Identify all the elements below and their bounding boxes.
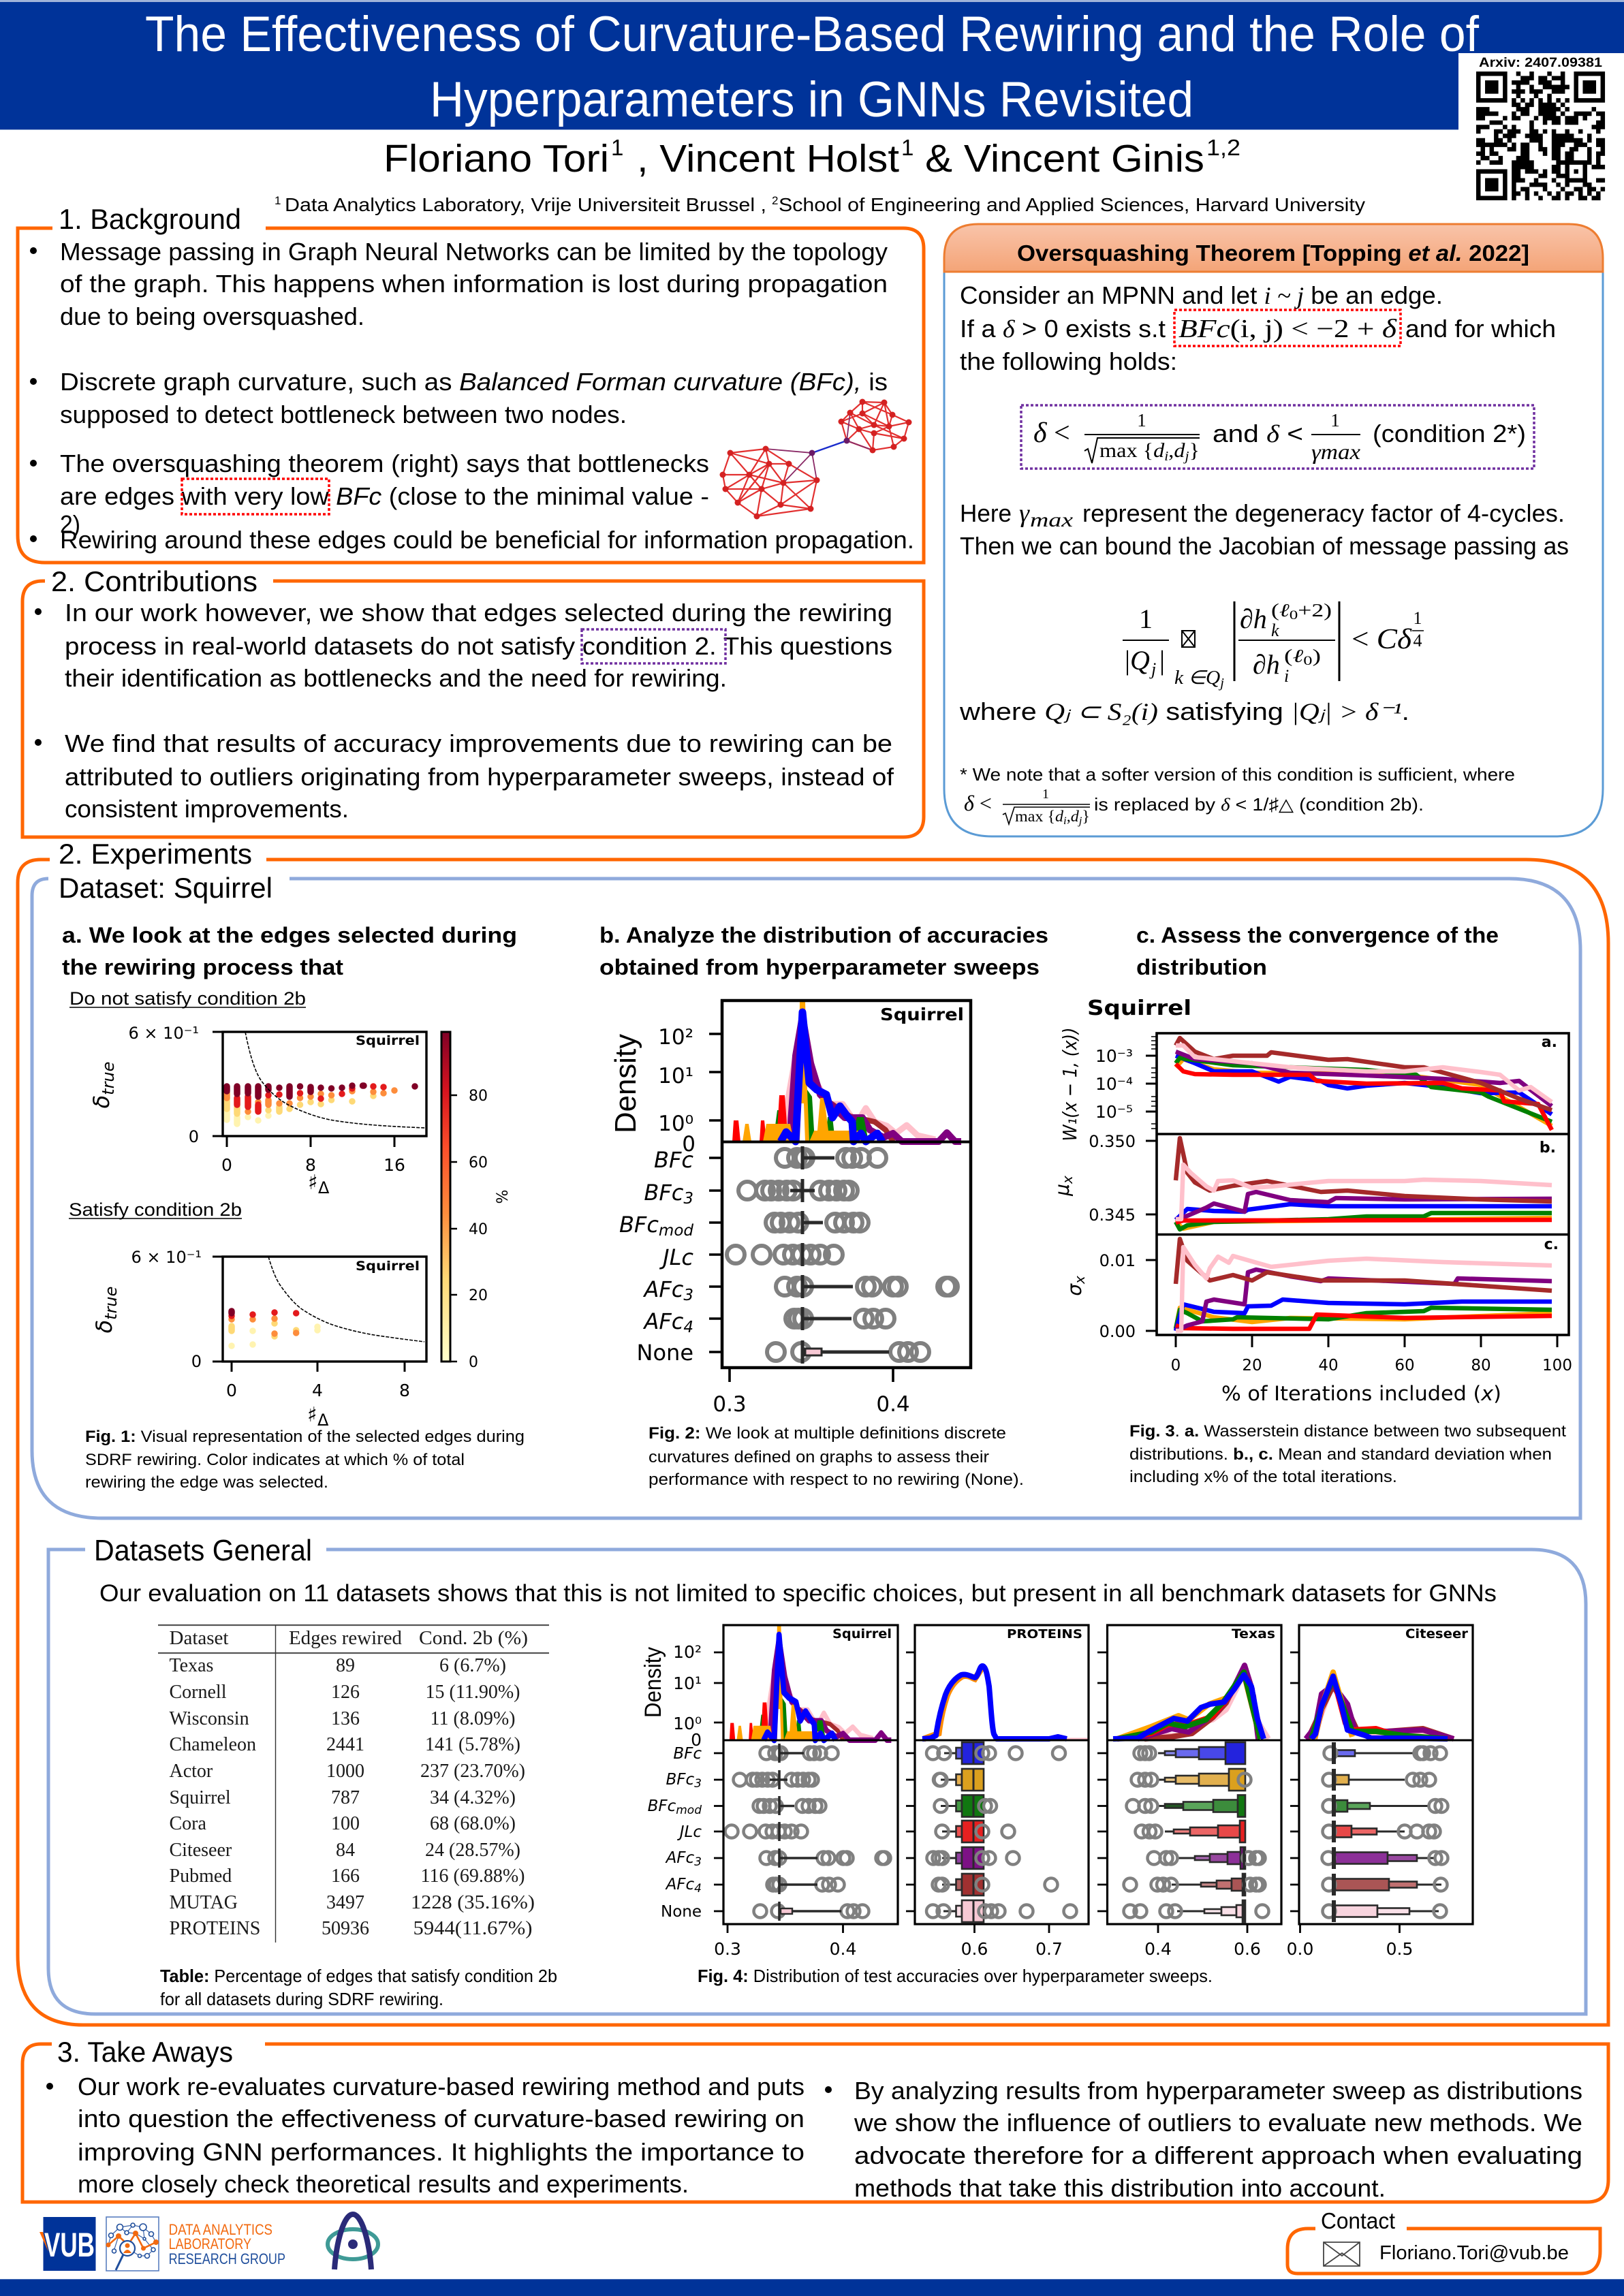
logo: Data Analytics Laboratory: LABORATORY (169, 2235, 251, 2252)
panel: Oversquashing Theorem: } (1189, 439, 1200, 462)
heading a: the rewiring process that (62, 955, 343, 979)
caption: Fig 2: curvatures defined on graphs to assess their (649, 1448, 989, 1466)
curves: panel a (1176, 1038, 1552, 1130)
panel: contact (1287, 2208, 1600, 2274)
title banner: Hyperparameters in GNNs Revisited (430, 72, 1193, 127)
chart: Fig 4 Squirrel panel: 0.4 (830, 1939, 856, 1959)
table: condition 2b percentages: 1000 (326, 1761, 364, 1782)
chart: Fig 4 Squirrel panel: mod (676, 1804, 702, 1817)
equation: Jacobian bound: |Q (1125, 645, 1150, 676)
chart: Fig 4 Squirrel panel: 3 (694, 1855, 702, 1869)
logo: VUB (40, 2217, 95, 2271)
table: condition 2b percentages: 24 (28.57%) (425, 1840, 520, 1861)
panel: Oversquashing Theorem: } (1082, 808, 1090, 825)
table: condition 2b percentages: Wisconsin (169, 1708, 249, 1729)
chart: Fig 4 Squirrel panel (640, 1625, 898, 1959)
colorbar: 20 (469, 1287, 488, 1304)
chart: Fig 4 Squirrel panel: JLc (677, 1823, 702, 1841)
panel: Oversquashing Theorem: max (1030, 509, 1074, 531)
table: condition 2b percentages: 34 (4.32%) (430, 1787, 516, 1808)
caption: Fig 1 (85, 1428, 525, 1492)
table: condition 2b percentages: 84 (336, 1840, 355, 1861)
panel: 1. Background: supposed to detect bottleneck between two nodes. (60, 400, 627, 428)
panel: Oversquashing Theorem: and δ < (1213, 420, 1303, 447)
logo: Data Analytics Laboratory: DATA ANALYTICS (169, 2221, 272, 2238)
subheading: satisfy: Satisfy condition 2b (69, 1199, 242, 1220)
scatter chart: satisfy: Δ (317, 1411, 329, 1430)
panel: 3. Take Aways: By analyzing results from hyperparameter sweep as distributions (854, 2077, 1582, 2105)
title banner (0, 0, 1624, 130)
panel: Oversquashing Theorem: Then we can bound the Jacobian of message passing as (960, 532, 1569, 560)
chart: Fig 4 Squirrel panel: Density (640, 1647, 666, 1718)
panel: Oversquashing Theorem: max {d (1015, 808, 1063, 825)
panel: Oversquashing Theorem: represent the degeneracy factor of 4-cycles. (1082, 499, 1565, 527)
authors: 1 (611, 135, 623, 160)
title banner: The Effectiveness of Curvature-Based Rewiring and the Role of (145, 7, 1480, 62)
scatter chart: satisfy: 8 (399, 1381, 410, 1400)
panel: 2. Contributions: attributed to outliers originating from hyperparameter sweeps, instead of (65, 763, 894, 791)
scatter chart: satisfy: 0 (191, 1352, 202, 1371)
chart: Fig 4 Citeseer panel: 0.5 (1386, 1939, 1413, 1959)
panel: Oversquashing Theorem: j (1183, 449, 1189, 464)
equation: Jacobian bound: ) (1312, 646, 1321, 666)
panel: contact: Floriano.Tori@vub.be (1379, 2242, 1569, 2264)
caption: Fig 3: distributions. b., c. Mean and standard deviation when (1129, 1445, 1552, 1464)
chart: convergence curves: b. (1540, 1139, 1556, 1157)
scatter chart: do not satisfy: 6 × 10⁻¹ (129, 1024, 199, 1043)
chart: accuracy distribution Squirrel: 0.4 (876, 1392, 910, 1417)
chart: convergence curves: Squirrel (1087, 996, 1191, 1020)
table: condition 2b percentages: MUTAG (169, 1892, 238, 1913)
scatter chart: do not satisfy: 16 (384, 1155, 405, 1175)
panel: Oversquashing Theorem: max {d (1099, 439, 1164, 462)
heading b (599, 923, 1048, 979)
authors: 1,2 (1206, 135, 1240, 160)
chart: accuracy distribution Squirrel: AFc (644, 1276, 683, 1302)
panel: Oversquashing Theorem: , (1067, 808, 1071, 825)
chart: Fig 4 Texas panel: 0.4 (1144, 1939, 1172, 1959)
scatter chart: satisfy: Squirrel (356, 1259, 420, 1274)
table: condition 2b percentages: 50936 (322, 1918, 369, 1939)
equation: Jacobian bound: j (1149, 659, 1156, 679)
scatter chart: do not satisfy: δ (89, 1095, 114, 1108)
chart: Fig 4 Citeseer panel: Citeseer (1405, 1626, 1469, 1641)
chart: convergence curves: 10⁻⁵ (1095, 1102, 1133, 1122)
scatter chart: do not satisfy: Squirrel (356, 1033, 420, 1048)
table: condition 2b percentages: 1228 (35.16%) (411, 1892, 535, 1913)
chart: Fig 4 Citeseer panel (1287, 1625, 1473, 1959)
equation: Jacobian bound: (ℓ (1284, 646, 1300, 666)
table: condition 2b percentages: Chameleon (169, 1734, 256, 1755)
equation: Jacobian bound (1123, 600, 1424, 691)
caption: Fig 2: Fig. 2: We look at multiple definitions discrete (649, 1424, 1006, 1443)
colorbar: 40 (469, 1221, 488, 1238)
caption: Fig 1: SDRF rewiring. Color indicates at which % of total (85, 1451, 465, 1469)
colorbar: 0 (469, 1354, 478, 1371)
equation: Jacobian bound: k (1271, 620, 1279, 640)
chart: Fig 4 Squirrel panel: 0 (691, 1730, 702, 1750)
chart: convergence curves: μ (1051, 1184, 1074, 1196)
authors: & Vincent Ginis (925, 137, 1204, 180)
panel: 3. Take Aways: advocate therefore for a different approach when evaluating (854, 2141, 1582, 2169)
table: condition 2b percentages: 100 (331, 1813, 360, 1834)
table: condition 2b percentages: 237 (23.70%) (420, 1761, 525, 1782)
panel: 2. Contributions: their identification as bottlenecks and the need for rewiring. (65, 664, 727, 692)
table: condition 2b percentages: 116 (69.88%) (421, 1866, 525, 1887)
chart: Fig 4 PROTEINS panel: 0.7 (1035, 1939, 1063, 1959)
table: condition 2b percentages: 787 (331, 1787, 360, 1808)
equation: Jacobian bound: (ℓ (1271, 600, 1287, 620)
chart: convergence curves: σ (1063, 1284, 1086, 1296)
chart: Fig 4 PROTEINS panel (906, 1625, 1089, 1959)
boxen rows (1335, 1750, 1441, 1917)
panel: Dataset Squirrel box: Dataset: Squirrel (59, 872, 272, 904)
table: condition 2b percentages: Citeseer (169, 1840, 232, 1861)
panel: 2. Experiments outer box: 2. Experiments (59, 838, 252, 870)
panel: Oversquashing Theorem: 1 (1330, 410, 1340, 430)
heading b: obtained from hyperparameter sweeps (599, 955, 1040, 979)
chart: Fig 4 Squirrel panel: 10¹ (673, 1673, 702, 1693)
scatter chart: satisfy: δ (91, 1320, 117, 1333)
heading a (62, 923, 517, 979)
chart: convergence curves: c. (1544, 1236, 1559, 1253)
panel: 1. Background: Discrete graph curvature, such as Balanced Forman curvature (BFc), is (60, 368, 888, 396)
panel: 1. Background: Message passing in Graph Neural Networks can be limited by the topology (60, 238, 888, 266)
chart: accuracy distribution Squirrel: AFc (644, 1308, 683, 1334)
table: condition 2b percentages: Dataset (169, 1628, 229, 1649)
caption: Fig 1: Fig. 1: Visual representation of the selected edges during (85, 1428, 525, 1446)
panel: Datasets General box (48, 1534, 1586, 2014)
chart: convergence curves (1051, 996, 1572, 1405)
scatter chart: do not satisfy: Δ (318, 1178, 330, 1197)
table: condition 2b percentages: 166 (331, 1866, 360, 1887)
scatter chart: do not satisfy: ♯ (308, 1171, 318, 1195)
subheading: do not satisfy: Do not satisfy condition 2b (69, 988, 306, 1009)
equation: Jacobian bound: 0 (1290, 608, 1298, 623)
affiliations: School of Engineering and Applied Sciences, Harvard University (779, 194, 1365, 215)
equation: Jacobian bound: 1 (1139, 603, 1153, 634)
chart: accuracy distribution Squirrel: 3 (683, 1190, 693, 1208)
chart: convergence curves: 20 (1242, 1357, 1262, 1374)
table: condition 2b percentages: Cora (169, 1813, 207, 1834)
chart: Fig 4 Citeseer panel: 0.0 (1287, 1939, 1313, 1959)
chart: Fig 4 PROTEINS panel: PROTEINS (1007, 1627, 1082, 1641)
icon: envelope (1324, 2242, 1360, 2266)
table: condition 2b percentages: Actor (169, 1761, 213, 1782)
curves: panel b (1176, 1138, 1552, 1229)
chart: Fig 4 Squirrel panel: BFc (648, 1797, 676, 1815)
chart: convergence curves: 0.01 (1099, 1251, 1136, 1270)
panel: Oversquashing Theorem: γmax (1311, 439, 1360, 464)
chart: Fig 4 Squirrel panel: 0.3 (714, 1939, 741, 1959)
equation: Jacobian bound: 1 (1413, 608, 1422, 628)
chart: accuracy distribution Squirrel: BFc (644, 1180, 683, 1206)
chart: Fig 4 PROTEINS panel: 0.6 (961, 1939, 988, 1959)
chart: convergence curves: 100 (1542, 1357, 1572, 1374)
logo: Data Analytics Laboratory: RESEARCH GROUP (169, 2250, 285, 2267)
panel: 3. Take Aways: improving GNN performances. It highlights the importance to (78, 2138, 805, 2166)
heading a: a. We look at the edges selected during (62, 923, 517, 947)
QR code with arXiv id (1458, 53, 1624, 204)
curves: panel c (1176, 1239, 1552, 1331)
affiliations: 2 (772, 194, 778, 207)
table: condition 2b percentages: 15 (11.90%) (426, 1682, 520, 1703)
boxen rows (1158, 1742, 1245, 1922)
chart: accuracy distribution Squirrel: None (637, 1340, 693, 1366)
colorbar: 60 (469, 1154, 488, 1171)
panel: Oversquashing Theorem: where Qⱼ ⊂ S₂(i) satisfying |Qⱼ| > δ⁻¹ . (959, 697, 1409, 725)
chart: Fig 4 Squirrel panel: AFc (666, 1849, 694, 1867)
panel: Oversquashing Theorem: 1 (1042, 787, 1049, 802)
table: condition 2b percentages: Cond. 2b (%) (419, 1628, 528, 1649)
chart: Fig 4 Squirrel panel: None (661, 1903, 702, 1921)
chart: convergence curves: x (1072, 1276, 1088, 1285)
chart: accuracy distribution Squirrel (609, 1001, 971, 1417)
scatter chart: satisfy: 6 × 10⁻¹ (131, 1248, 202, 1267)
scatter chart: satisfy: 0 (226, 1381, 237, 1400)
icon: graph with bottleneck (719, 399, 911, 519)
chart: convergence curves: 0.345 (1089, 1206, 1136, 1225)
table: condition 2b percentages: PROTEINS (169, 1918, 260, 1939)
panel: 2. Contributions: We find that results of accuracy improvements due to rewiring can be (65, 729, 892, 757)
logo: A with ring (328, 2214, 378, 2269)
chart: convergence curves: x (1059, 1176, 1076, 1184)
table: condition 2b percentages: Edges rewired (289, 1628, 402, 1649)
caption: Fig 2 (649, 1424, 1024, 1489)
chart: Fig 4 Squirrel panel: BFc (673, 1745, 702, 1763)
panel: Oversquashing Theorem: d (1174, 439, 1186, 462)
chart: Fig 4 Squirrel panel: 4 (694, 1882, 702, 1896)
table: condition 2b percentages: 2441 (326, 1734, 364, 1755)
equation: Jacobian bound: j (1218, 676, 1224, 691)
panel: 1. Background: 1. Background (59, 203, 241, 235)
chart: Fig 4 Squirrel panel: 10² (673, 1642, 702, 1662)
logo: VUB: VUB (44, 2226, 95, 2264)
heading b: b. Analyze the distribution of accuracies (599, 923, 1048, 947)
table: condition 2b percentages: 3497 (326, 1892, 364, 1913)
chart: Fig 4 Texas panel (1097, 1625, 1281, 1959)
table: condition 2b percentages: 6 (6.7%) (439, 1655, 506, 1676)
panel: 2. Contributions: process in real-world datasets do not satisfy condition 2. This questions (65, 632, 892, 660)
chart: accuracy distribution Squirrel: 10² (658, 1025, 693, 1050)
chart: Fig 4 Texas panel: Texas (1232, 1626, 1275, 1641)
scatter chart: do not satisfy: 8 (305, 1155, 316, 1175)
chart: convergence curves: 0.00 (1099, 1322, 1136, 1341)
panel: 3. Take Aways: 3. Take Aways (57, 2036, 233, 2068)
panel: Oversquashing Theorem: 1 (1137, 410, 1146, 430)
panel: Oversquashing Theorem: (condition 2*) (1373, 420, 1526, 447)
panel: Oversquashing Theorem: δ < (964, 791, 992, 815)
chart: accuracy distribution Squirrel: 10⁰ (658, 1112, 693, 1136)
panel: 2. Contributions: In our work however, we show that edges selected during the rewiring (65, 599, 892, 627)
table: condition 2b percentages (158, 1625, 549, 1943)
equation: Jacobian bound: < Cδ (1352, 624, 1413, 655)
authors: Floriano Tori (384, 137, 609, 180)
panel: 3. Take Aways: we show the influence of outliers to evaluate new methods. We (854, 2109, 1582, 2137)
logo: Data Analytics Laboratory (106, 2217, 285, 2271)
panel: 3. Take Aways: methods that take this distribution into account. (854, 2174, 1386, 2202)
panel: Oversquashing Theorem: γ (1019, 499, 1030, 528)
heading c: c. Assess the convergence of the (1136, 923, 1499, 947)
QR code with arXiv id: Arxiv: 2407.09381 (1479, 56, 1602, 70)
panel: Datasets General box: Our evaluation on 11 datasets shows that this is not limited to specific choices, but present in all benchmark datasets for GNNs (99, 1580, 1497, 1607)
panel: 3. Take Aways: Our work re-evaluates curvature-based rewiring method and puts (78, 2073, 805, 2101)
chart: accuracy distribution Squirrel: 0 (682, 1132, 696, 1157)
caption: Fig 1: rewiring the edge was selected. (85, 1473, 328, 1492)
table: condition 2b percentages: 126 (331, 1682, 360, 1703)
panel: Oversquashing Theorem: Here (960, 499, 1012, 527)
equation: Jacobian bound: | (1159, 645, 1165, 676)
table: condition 2b percentages: 136 (331, 1708, 360, 1729)
scatter chart: satisfy: true (102, 1287, 121, 1320)
chart: convergence curves: 40 (1318, 1357, 1339, 1374)
chart: accuracy distribution Squirrel: 10¹ (658, 1064, 693, 1088)
panel: 1. Background: The oversquashing theorem (right) says that bottlenecks (60, 450, 709, 477)
panel: Oversquashing Theorem: and for which (1405, 315, 1556, 343)
chart: accuracy distribution Squirrel: 3 (683, 1287, 693, 1304)
panel: Oversquashing Theorem: BFc (i, j) < −2 + δ (1178, 315, 1398, 343)
panel: 3. Take Aways: more closely check theoretical results and experiments. (78, 2170, 689, 2198)
chart: Fig 4 Texas panel: 0.6 (1234, 1939, 1261, 1959)
colorbar: % (495, 1190, 512, 1204)
chart: accuracy distribution Squirrel: Density (609, 1034, 642, 1133)
equation: Jacobian bound: ∂h (1253, 649, 1280, 680)
panel: 3. Take Aways: into question the effectiveness of curvature-based rewiring on (78, 2105, 805, 2133)
equation: Jacobian bound: i (1284, 666, 1289, 686)
boxen rows (941, 1742, 984, 1922)
equation: Jacobian bound: 0 (1303, 654, 1312, 668)
panel: Oversquashing Theorem: is replaced by δ < 1/♯△ (condition 2b). (1094, 794, 1424, 815)
table: condition 2b percentages: 68 (68.0%) (430, 1813, 516, 1834)
scatter chart: do not satisfy (89, 1024, 426, 1197)
equation: Jacobian bound: 4 (1413, 631, 1422, 650)
panel: Oversquashing Theorem: , (1168, 439, 1174, 462)
chart: accuracy distribution Squirrel: mod (659, 1222, 693, 1240)
chart: convergence curves: 60 (1394, 1357, 1415, 1374)
chart: convergence curves: 10⁻³ (1095, 1046, 1133, 1066)
chart: accuracy distribution Squirrel: JLc (659, 1244, 693, 1270)
panel: Oversquashing Theorem: Oversquashing Theorem [Topping et al. 2022] (1017, 240, 1529, 266)
panel: Oversquashing Theorem: i (1164, 449, 1168, 464)
chart: Fig 4 Squirrel panel: 10⁰ (673, 1714, 702, 1733)
table: condition 2b percentages: Texas (169, 1655, 213, 1676)
chart: convergence curves: 0 (1171, 1357, 1181, 1374)
colorbar (441, 1032, 512, 1371)
scatter chart: do not satisfy: 0 (189, 1127, 199, 1146)
affiliations: Data Analytics Laboratory, Vrije Universiteit Brussel , (285, 194, 766, 215)
table: condition 2b percentages: Squirrel (169, 1787, 231, 1808)
panel: Oversquashing Theorem: i (1063, 815, 1067, 827)
affiliations: 1 (275, 194, 281, 207)
scatter chart: do not satisfy: 0 (221, 1155, 232, 1175)
authors (384, 135, 1240, 180)
panel: 2. Contributions: 2. Contributions (51, 565, 257, 597)
caption: Fig 4: Fig. 4: Distribution of test accuracies over hyperparameter sweeps. (698, 1966, 1213, 1986)
chart: Fig 4 Squirrel panel: 3 (694, 1777, 702, 1791)
equation: Jacobian bound: k ∈Q (1174, 667, 1218, 689)
table: condition 2b percentages: 141 (5.78%) (425, 1734, 520, 1755)
chart: accuracy distribution Squirrel: BFc (654, 1147, 693, 1173)
panel: 1. Background: 2) (60, 510, 80, 538)
panel: contact: Contact (1321, 2208, 1395, 2233)
heading c: distribution (1136, 955, 1267, 979)
panel: Oversquashing Theorem: j (1078, 815, 1082, 827)
chart: accuracy distribution Squirrel: 0.3 (713, 1392, 747, 1417)
panel: 1. Background: of the graph. This happens when information is lost during propagation (60, 270, 888, 298)
panel: 1. Background (18, 203, 924, 563)
table: condition 2b percentages: 89 (336, 1655, 355, 1676)
chart: convergence curves: 0.350 (1089, 1132, 1136, 1151)
panel: 2. Contributions (22, 565, 924, 837)
panel: 2. Contributions: consistent improvements. (65, 795, 349, 823)
scatter chart: do not satisfy: true (99, 1062, 118, 1095)
panel: Datasets General box: Datasets General (94, 1534, 312, 1567)
chart: Fig 4 Squirrel panel: BFc (666, 1771, 694, 1789)
chart: accuracy distribution Squirrel: BFc (619, 1212, 659, 1238)
chart: accuracy distribution Squirrel: Squirrel (880, 1005, 964, 1024)
panel: Oversquashing Theorem: d (1071, 808, 1079, 825)
panel: Oversquashing Theorem: Consider an MPNN and let i ~ j be an edge. (960, 281, 1443, 309)
panel: 1. Background: are edges with very low BFc (close to the minimal value - (60, 482, 709, 510)
chart: Fig 4 Squirrel panel: AFc (666, 1876, 694, 1893)
heading c (1136, 923, 1499, 979)
affiliations (275, 194, 1365, 215)
panel: Oversquashing Theorem: If a δ > 0 exists s.t (960, 315, 1166, 343)
equation: Jacobian bound: +2) (1298, 600, 1332, 620)
panel: Dataset Squirrel box (32, 872, 1580, 1518)
equation: Jacobian bound: ∂h (1240, 603, 1267, 634)
chart: convergence curves: 80 (1471, 1357, 1491, 1374)
caption: Table: Table: Percentage of edges that satisfy condition 2b (160, 1966, 557, 1986)
authors: , Vincent Holst (637, 137, 899, 180)
chart: Fig 4 Squirrel panel: Squirrel (832, 1626, 892, 1641)
caption: Fig 3: Fig. 3. a. Wasserstein distance between two subsequent (1129, 1422, 1566, 1441)
authors: 1 (901, 135, 914, 160)
colorbar: 80 (469, 1088, 488, 1105)
chart: convergence curves: % of Iterations included ( x) (1221, 1382, 1501, 1405)
table: condition 2b percentages: Pubmed (169, 1866, 232, 1887)
caption: Table: for all datasets during SDRF rewiring. (160, 1989, 443, 2009)
table: condition 2b percentages: Cornell (169, 1682, 227, 1703)
caption: Fig 3 (1129, 1422, 1566, 1486)
panel: Oversquashing Theorem: * We note that a softer version of this condition is sufficient, where (960, 764, 1515, 785)
chart: convergence curves: 10⁻⁴ (1095, 1074, 1133, 1094)
table: condition 2b percentages: 11 (8.09%) (431, 1708, 515, 1729)
caption: Fig 2: performance with respect to no rewiring (None). (649, 1471, 1024, 1489)
chart: accuracy distribution Squirrel: 4 (683, 1319, 693, 1336)
panel: 1. Background: due to being oversquashed. (60, 302, 364, 330)
chart: convergence curves: a. (1542, 1034, 1557, 1051)
chart: convergence curves: W₁(x − 1, (x)) (1059, 1027, 1081, 1142)
panel: Oversquashing Theorem: the following holds: (960, 347, 1177, 375)
scatter chart: satisfy: ♯ (307, 1403, 317, 1427)
table: condition 2b percentages: 5944(11.67%) (413, 1918, 533, 1939)
panel: Oversquashing Theorem (944, 224, 1603, 836)
scatter chart: satisfy: 4 (312, 1381, 323, 1400)
caption: Fig 3: including x% of the total iterations. (1129, 1468, 1397, 1486)
panel: Oversquashing Theorem: δ < (1033, 418, 1070, 449)
footer bar (0, 2279, 1624, 2296)
caption: Table (160, 1966, 557, 2009)
panel: 1. Background: Rewiring around these edges could be beneficial for information propagation. (60, 526, 914, 554)
panel: 3. Take Aways (22, 2036, 1608, 2202)
scatter chart: satisfy (91, 1248, 426, 1430)
